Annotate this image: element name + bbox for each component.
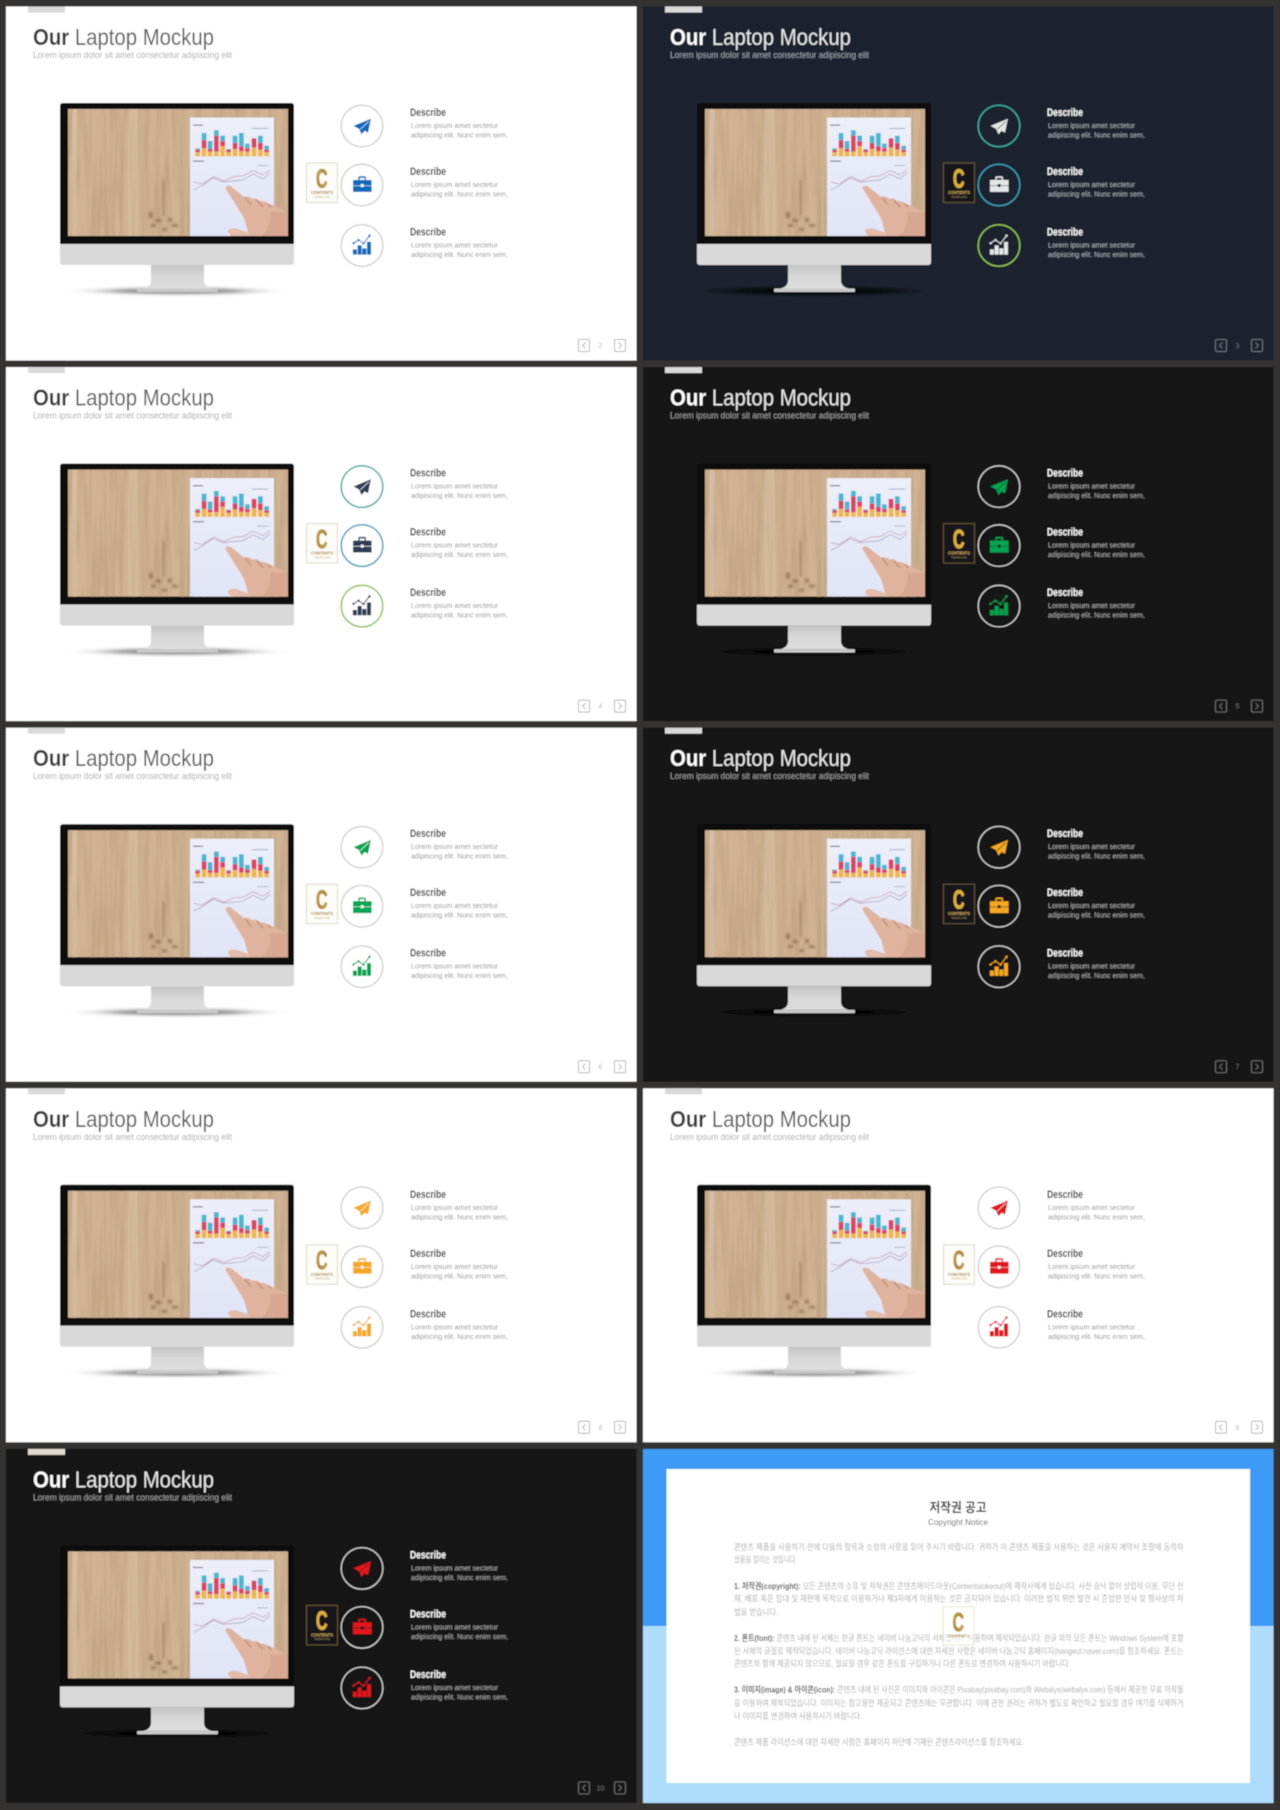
text block 1 xyxy=(410,468,508,500)
logo badge overlay xyxy=(943,1607,974,1645)
page navigation xyxy=(578,1782,626,1794)
top accent bar xyxy=(665,728,702,734)
text block 1: Describe xyxy=(410,468,446,480)
logo badge xyxy=(944,163,974,202)
paragraph 2: font: 된 서체의 글꼴로 제작되었습니다. 네이버 나눔고딕 라이선스에 대한 자세한 사항은 네이버 나눔고딕 홈페이지(hangeul.naver.com)를 참조하세요. 폰트는 xyxy=(734,1646,1184,1656)
text block 2: adipiscing elit. Nunc enim sem, xyxy=(411,190,508,198)
title: Our Laptop Mockup xyxy=(670,745,851,771)
slide background xyxy=(643,1088,1274,1442)
top accent bar xyxy=(665,367,702,373)
page navigation: 2 xyxy=(599,343,603,350)
monitor shadow xyxy=(61,286,293,296)
text block 1: Lorem ipsum amet sectetur xyxy=(1048,121,1135,130)
notice heading: 저작권 공고 xyxy=(930,1500,987,1515)
page navigation: 8 xyxy=(599,1425,603,1432)
paragraph 2: font xyxy=(734,1633,1184,1668)
logo badge xyxy=(306,1605,338,1645)
icon: paper plane xyxy=(978,1187,1020,1229)
icon: briefcase xyxy=(978,164,1020,206)
icon: growth chart xyxy=(341,1667,383,1709)
logo badge: C xyxy=(316,524,328,554)
text block 1: Lorem ipsum amet sectetur xyxy=(1048,1203,1135,1212)
text block 3: Describe xyxy=(410,587,446,599)
monitor shadow xyxy=(61,1728,293,1738)
text block 2: Lorem ipsum amet sectetur xyxy=(411,180,498,189)
text block 2 xyxy=(1047,527,1145,559)
monitor mockup with photo xyxy=(60,1185,294,1374)
subtitle: Lorem ipsum dolor sit amet consectetur adipiscing elit xyxy=(33,771,232,782)
text block 1 xyxy=(1047,107,1145,140)
slide 4: white with coloured rings and navy icons xyxy=(6,367,636,721)
text block 2: Describe xyxy=(1047,166,1083,178)
paragraph 1: copyright: 벌을 받습니다. xyxy=(734,1607,778,1617)
logo badge overlay: CONTENTS xyxy=(948,1634,970,1638)
icon: paper plane xyxy=(341,1187,383,1229)
logo badge: TEMPLATE xyxy=(314,916,330,920)
paragraph 3: images and icons xyxy=(734,1684,1184,1721)
text block 2: Describe xyxy=(1047,1248,1083,1260)
text block 2: adipiscing elit. Nunc enim sem, xyxy=(1048,550,1145,559)
icon: paper plane xyxy=(341,105,383,147)
page navigation xyxy=(578,700,626,712)
logo badge: TEMPLATE xyxy=(951,195,967,199)
title: Our Laptop Mockup xyxy=(33,24,214,50)
slide background xyxy=(643,6,1274,360)
icon: briefcase xyxy=(341,525,383,566)
monitor shadow xyxy=(61,1368,293,1378)
text block 1: adipiscing elit. Nunc enim sem, xyxy=(411,1573,508,1582)
text block 2: Describe xyxy=(410,887,446,899)
monitor mockup with photo xyxy=(60,1545,294,1734)
background lower pale blue xyxy=(643,1626,1274,1803)
paragraph 3: images and icons: 3. 이미지(image) & 아이콘(icon): 콘텐츠 내에 된 사진은 이미지와 아이콘은 Pixabay(pixabay.com)와 Webalys(webalys.com) 등에서 제공한 무료 저작물 xyxy=(734,1684,1184,1694)
page navigation: 3 xyxy=(1236,343,1240,350)
text block 2: Lorem ipsum amet sectetur xyxy=(411,1262,498,1271)
page navigation xyxy=(1216,700,1262,712)
text block 3: adipiscing elit. Nunc enim sem, xyxy=(411,611,508,620)
title: Our Laptop Mockup xyxy=(670,385,851,411)
text block 3 xyxy=(410,1308,508,1341)
paragraph 2: font: 2. 폰트(font): 콘텐츠 내에 된 서체는 한글 폰트는 네이버 나눔고딕의 서체입니다. 사용하여 제작되었습니다. 한글 외의 모든 폰트는 Windows System에 포함 xyxy=(734,1633,1184,1643)
page navigation xyxy=(1216,1061,1262,1073)
top accent bar xyxy=(28,6,65,12)
text block 2: Lorem ipsum amet sectetur xyxy=(1048,180,1135,189)
text block 3 xyxy=(1047,948,1145,980)
slide background xyxy=(6,6,636,360)
page navigation xyxy=(578,1421,626,1433)
subtitle: Lorem ipsum dolor sit amet consectetur adipiscing elit xyxy=(33,50,232,61)
text block 1: Describe xyxy=(410,1189,446,1201)
text block 3: adipiscing elit. Nunc enim sem, xyxy=(1048,250,1145,259)
text block 2: adipiscing elit. Nunc enim sem, xyxy=(411,1632,508,1641)
text block 2: Lorem ipsum amet sectetur xyxy=(411,1622,498,1631)
page navigation: 10 xyxy=(597,1785,604,1792)
logo badge xyxy=(306,524,338,563)
slide background xyxy=(6,1449,636,1803)
intro paragraph: 콘텐츠 제품을 사용하기 전에 다음의 항목과 소정의 사항을 읽어 주시기 바랍니다. 귀하가 이 콘텐츠 제품을 사용하는 것은 사용자 계약서 조항에 동의하 xyxy=(734,1542,1184,1552)
text block 3 xyxy=(410,226,508,259)
icon: growth chart xyxy=(341,585,383,627)
logo badge: C xyxy=(316,1245,328,1275)
monitor shadow xyxy=(698,1368,930,1378)
monitor mockup with photo xyxy=(60,103,294,292)
intro paragraph xyxy=(734,1542,1184,1564)
text block 3 xyxy=(1047,1308,1145,1341)
title: Our Laptop Mockup xyxy=(33,1106,214,1132)
logo badge: C xyxy=(953,1245,965,1275)
text block 1 xyxy=(1047,1189,1145,1221)
text block 2: Describe xyxy=(410,166,446,178)
slide background xyxy=(6,728,636,1082)
text block 2: Describe xyxy=(1047,887,1083,899)
logo badge: CONTENTS xyxy=(311,1632,333,1637)
text block 1: adipiscing elit. Nunc enim sem, xyxy=(411,130,508,140)
text block 2 xyxy=(410,1608,508,1641)
text block 3: Describe xyxy=(1047,948,1083,960)
monitor mockup with photo xyxy=(60,824,294,1013)
logo badge: CONTENTS xyxy=(311,911,333,916)
paragraph 1: copyright: 1. 저작권(copyright): 모든 콘텐츠의 소유 및 저작권은 콘텐츠메이드아웃(Contentstokeout)에 제작사에게 있습니다. 사전 승낙 없이 상업적 이용, 무단 전 xyxy=(734,1581,1184,1591)
text block 2: adipiscing elit. Nunc enim sem, xyxy=(411,550,508,559)
paragraph 1: copyright xyxy=(734,1581,1184,1617)
text block 1: Lorem ipsum amet sectetur xyxy=(1048,482,1135,491)
paragraph 3: images and icons: 을 이용하여 제작되었습니다. 이미지는 참고용만 제공되고 콘텐츠에는 무관합니다. 이에 관한 권리는 귀하가 별도로 확인하고 필요할 경우 여기를 삭제하거 xyxy=(734,1698,1184,1708)
slide background xyxy=(643,367,1274,721)
slide 6: white with green icons xyxy=(6,728,636,1082)
text block 3: adipiscing elit. Nunc enim sem, xyxy=(1048,1332,1145,1341)
text block 2: adipiscing elit. Nunc enim sem, xyxy=(1048,190,1145,198)
text block 2 xyxy=(1047,1248,1145,1280)
white notice panel xyxy=(666,1469,1250,1783)
top accent bar xyxy=(665,1088,702,1094)
text block 1: Describe xyxy=(410,107,446,119)
text block 1: Lorem ipsum amet sectetur xyxy=(411,1563,498,1572)
page navigation xyxy=(1216,340,1262,352)
slide 10: black with red icons xyxy=(6,1449,636,1803)
text block 1: Describe xyxy=(1047,468,1083,480)
subtitle: Lorem ipsum dolor sit amet consectetur adipiscing elit xyxy=(670,411,869,422)
text block 3: adipiscing elit. Nunc enim sem, xyxy=(411,1332,508,1341)
text block 3: adipiscing elit. Nunc enim sem, xyxy=(411,250,508,259)
icon: growth chart xyxy=(978,225,1020,266)
top accent bar xyxy=(28,367,65,373)
text block 2: Lorem ipsum amet sectetur xyxy=(1048,1262,1135,1271)
subtitle: Lorem ipsum dolor sit amet consectetur adipiscing elit xyxy=(33,411,232,422)
title: Our Laptop Mockup xyxy=(33,385,214,411)
logo badge: TEMPLATE xyxy=(951,555,967,559)
slide background xyxy=(6,1088,636,1442)
closing note: 콘텐츠 제품 라이선스에 대한 자세한 사항은 홈페이지 하단에 기재된 콘텐츠라이선스를 참조하세요. xyxy=(734,1737,1024,1747)
text block 3: Lorem ipsum amet sectetur xyxy=(1048,962,1135,971)
icon: briefcase xyxy=(341,1246,383,1288)
logo badge: C xyxy=(953,524,965,554)
title: Our Laptop Mockup xyxy=(33,745,214,771)
subtitle: Lorem ipsum dolor sit amet consectetur adipiscing elit xyxy=(670,1132,869,1143)
top accent bar xyxy=(28,1449,65,1455)
text block 3: Lorem ipsum amet sectetur xyxy=(1048,601,1135,610)
logo badge xyxy=(306,884,338,924)
monitor mockup with photo xyxy=(60,464,294,653)
icon: growth chart xyxy=(978,585,1020,627)
text block 2: Describe xyxy=(410,527,446,539)
subtitle: Lorem ipsum dolor sit amet consectetur adipiscing elit xyxy=(670,50,869,61)
monitor mockup with photo xyxy=(697,464,931,653)
logo badge: CONTENTS xyxy=(311,551,333,556)
text block 1: Lorem ipsum amet sectetur xyxy=(411,842,498,851)
top accent bar xyxy=(28,1088,65,1094)
logo badge: CONTENTS xyxy=(948,1272,970,1277)
icon: paper plane xyxy=(341,1548,383,1589)
text block 3 xyxy=(410,1669,508,1701)
text block 3: Lorem ipsum amet sectetur xyxy=(411,601,498,610)
text block 3: Describe xyxy=(1047,1308,1083,1320)
logo badge: C xyxy=(316,163,328,193)
paragraph 1: copyright: 재, 배포 혹은 임대 및 재판매 목적으로 이용하거나 제3자에게 이용하는 것은 금지되어 있습니다. 이러한 법칙 위반 발견 시 준엄한 민사 및 형사상의 처 xyxy=(734,1594,1184,1604)
icon: growth chart xyxy=(341,1306,383,1348)
text block 1 xyxy=(1047,828,1145,861)
paragraph 3: images and icons: 나 이미지를 변경하여 사용하시기 바랍니다. xyxy=(734,1711,862,1721)
logo badge: CONTENTS xyxy=(948,190,970,195)
slide 11: copyright notice xyxy=(643,1449,1274,1803)
text block 1: adipiscing elit. Nunc enim sem, xyxy=(411,491,508,500)
text block 1: adipiscing elit. Nunc enim sem, xyxy=(1048,130,1145,140)
page navigation xyxy=(1216,1421,1262,1433)
logo badge: CONTENTS xyxy=(311,1272,333,1277)
text block 2: adipiscing elit. Nunc enim sem, xyxy=(411,1271,508,1280)
logo badge: C xyxy=(316,1606,328,1636)
paragraph 2: font: 콘텐츠와 함께 제공되지 않으므로, 필요할 경우 같은 폰트를 구입하거나 다른 폰트로 변경하여 사용하시기 바랍니다. xyxy=(734,1658,1070,1668)
page navigation: 5 xyxy=(1236,704,1240,711)
logo badge: TEMPLATE xyxy=(951,1277,967,1281)
logo badge overlay: C xyxy=(952,1607,964,1637)
slide 2: white with blue icons xyxy=(6,6,636,360)
text block 2: Lorem ipsum amet sectetur xyxy=(411,901,498,910)
text block 3: Describe xyxy=(1047,226,1083,238)
text block 3: Lorem ipsum amet sectetur xyxy=(1048,1322,1135,1331)
text block 1: Describe xyxy=(410,1549,446,1561)
slide 3: navy with coloured rings xyxy=(643,6,1274,360)
logo badge: C xyxy=(953,163,965,193)
text block 3: adipiscing elit. Nunc enim sem, xyxy=(1048,611,1145,620)
text block 2: Describe xyxy=(1047,527,1083,539)
text block 2: Describe xyxy=(410,1248,446,1260)
text block 1: adipiscing elit. Nunc enim sem, xyxy=(1048,852,1145,861)
text block 2: Describe xyxy=(410,1608,446,1620)
page navigation: 6 xyxy=(599,1064,603,1071)
logo badge: TEMPLATE xyxy=(951,916,967,920)
text block 3: adipiscing elit. Nunc enim sem, xyxy=(1048,971,1145,980)
text block 1: adipiscing elit. Nunc enim sem, xyxy=(411,1212,508,1221)
icon: growth chart xyxy=(341,225,383,266)
text block 3 xyxy=(1047,226,1145,259)
monitor shadow xyxy=(698,647,930,657)
text block 2: Lorem ipsum amet sectetur xyxy=(1048,901,1135,910)
slide 9: white with red icons xyxy=(643,1088,1274,1442)
icon: briefcase xyxy=(978,885,1020,927)
icon: paper plane xyxy=(341,466,383,507)
text block 3: adipiscing elit. Nunc enim sem, xyxy=(411,1692,508,1701)
logo badge xyxy=(944,1245,974,1284)
monitor mockup with photo xyxy=(697,1185,931,1374)
logo badge: TEMPLATE xyxy=(314,195,330,199)
logo badge xyxy=(944,524,974,563)
subtitle: Lorem ipsum dolor sit amet consectetur adipiscing elit xyxy=(33,1132,232,1143)
title: Our Laptop Mockup xyxy=(670,24,851,50)
text block 2: Lorem ipsum amet sectetur xyxy=(411,541,498,550)
text block 3: Lorem ipsum amet sectetur xyxy=(411,240,498,250)
text block 3: Describe xyxy=(410,948,446,960)
text block 2 xyxy=(1047,166,1145,198)
text block 1 xyxy=(410,1189,508,1221)
logo badge: TEMPLATE xyxy=(314,555,330,559)
text block 3: Describe xyxy=(1047,587,1083,599)
logo badge xyxy=(306,1245,338,1284)
text block 1: Lorem ipsum amet sectetur xyxy=(411,1203,498,1212)
logo badge: TEMPLATE xyxy=(314,1637,330,1641)
background upper blue xyxy=(643,1449,1274,1626)
text block 2 xyxy=(1047,887,1145,920)
icon: paper plane xyxy=(341,826,383,868)
icon: paper plane xyxy=(978,466,1020,507)
text block 1: Describe xyxy=(1047,1189,1083,1201)
icon: growth chart xyxy=(341,946,383,988)
slide 5: black with green icons xyxy=(643,367,1274,721)
monitor mockup with photo xyxy=(697,103,931,292)
page navigation xyxy=(578,340,626,352)
text block 1 xyxy=(410,828,508,861)
page navigation xyxy=(578,1061,626,1073)
text block 1: adipiscing elit. Nunc enim sem, xyxy=(1048,1212,1145,1221)
text block 2 xyxy=(410,166,508,198)
logo badge: CONTENTS xyxy=(948,911,970,916)
text block 1 xyxy=(1047,468,1145,500)
text block 1: Lorem ipsum amet sectetur xyxy=(411,482,498,491)
text block 1: adipiscing elit. Nunc enim sem, xyxy=(1048,491,1145,500)
title: Our Laptop Mockup xyxy=(670,1106,851,1132)
slide 7: black with orange icons xyxy=(643,728,1274,1082)
icon: briefcase xyxy=(341,885,383,927)
slide 8: white with orange icons xyxy=(6,1088,636,1442)
text block 1 xyxy=(410,1549,508,1582)
text block 3 xyxy=(410,587,508,620)
icon: paper plane xyxy=(978,826,1020,868)
text block 3: adipiscing elit. Nunc enim sem, xyxy=(411,971,508,980)
slide background xyxy=(6,367,636,721)
icon: briefcase xyxy=(341,1607,383,1648)
text block 1: Describe xyxy=(1047,828,1083,840)
text block 3: Describe xyxy=(410,1669,446,1681)
text block 1: Lorem ipsum amet sectetur xyxy=(1048,842,1135,851)
text block 2 xyxy=(410,527,508,559)
text block 3 xyxy=(1047,587,1145,620)
intro paragraph: 셨음을 알리는 것입니다. xyxy=(734,1554,797,1564)
text block 1: Describe xyxy=(1047,107,1083,119)
title: Our Laptop Mockup xyxy=(33,1466,214,1492)
monitor shadow xyxy=(61,647,293,657)
logo badge xyxy=(306,163,338,202)
text block 2 xyxy=(410,1248,508,1280)
text block 2: Lorem ipsum amet sectetur xyxy=(1048,541,1135,550)
text block 2: adipiscing elit. Nunc enim sem, xyxy=(411,911,508,920)
icon: briefcase xyxy=(978,525,1020,566)
text block 3: Describe xyxy=(410,226,446,238)
text block 3: Lorem ipsum amet sectetur xyxy=(411,1322,498,1331)
logo badge: CONTENTS xyxy=(948,551,970,556)
text block 3: Lorem ipsum amet sectetur xyxy=(411,1683,498,1692)
icon: paper plane xyxy=(978,105,1020,147)
text block 1 xyxy=(410,107,508,140)
logo badge: TEMPLATE xyxy=(314,1277,330,1281)
icon: growth chart xyxy=(978,1306,1020,1348)
page navigation: 7 xyxy=(1236,1064,1240,1071)
text block 1: Lorem ipsum amet sectetur xyxy=(411,121,498,130)
text block 1: adipiscing elit. Nunc enim sem, xyxy=(411,852,508,861)
slide background xyxy=(643,728,1274,1082)
text block 1: Describe xyxy=(410,828,446,840)
notice subheading: Copyright Notice xyxy=(928,1517,988,1527)
text block 3: Lorem ipsum amet sectetur xyxy=(411,962,498,971)
icon: briefcase xyxy=(978,1246,1020,1288)
monitor shadow xyxy=(698,1007,930,1017)
subtitle: Lorem ipsum dolor sit amet consectetur adipiscing elit xyxy=(33,1492,232,1503)
logo badge: C xyxy=(316,885,328,915)
icon: briefcase xyxy=(341,164,383,206)
logo badge: CONTENTS xyxy=(311,190,333,195)
icon: growth chart xyxy=(978,946,1020,988)
page navigation: 4 xyxy=(599,704,603,711)
text block 3 xyxy=(410,948,508,980)
text block 3: Describe xyxy=(410,1308,446,1320)
monitor mockup with photo xyxy=(697,824,931,1013)
top accent bar xyxy=(28,728,65,734)
logo badge: C xyxy=(953,885,965,915)
monitor shadow xyxy=(698,286,930,296)
top accent bar xyxy=(665,6,702,12)
page navigation: 9 xyxy=(1236,1425,1240,1432)
subtitle: Lorem ipsum dolor sit amet consectetur adipiscing elit xyxy=(670,771,869,782)
text block 2: adipiscing elit. Nunc enim sem, xyxy=(1048,911,1145,920)
monitor shadow xyxy=(61,1007,293,1017)
text block 3: Lorem ipsum amet sectetur xyxy=(1048,240,1135,250)
logo badge xyxy=(944,884,974,924)
text block 2 xyxy=(410,887,508,920)
text block 2: adipiscing elit. Nunc enim sem, xyxy=(1048,1271,1145,1280)
